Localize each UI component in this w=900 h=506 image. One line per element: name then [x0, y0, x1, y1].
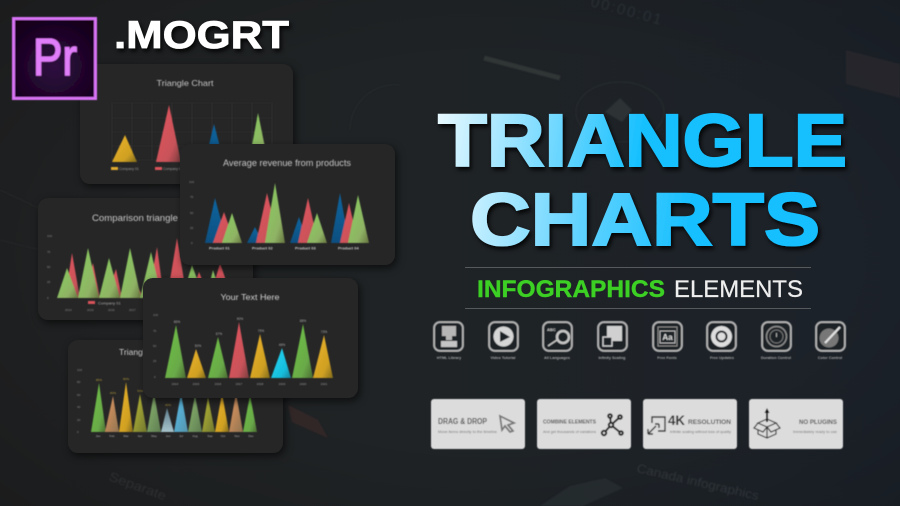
value labels: 70% — [137, 389, 143, 393]
icon: Free Fonts: Aa — [662, 333, 673, 342]
subtitle: INFOGRAPHICS ELEMENTS: ELEMENTS — [674, 276, 803, 303]
triangles: monthly series — [91, 382, 257, 432]
month labels — [96, 434, 254, 438]
triangles: yearly series — [165, 322, 333, 378]
chart card: Comparison triangle chart — [38, 198, 253, 320]
year labels: 2015 — [193, 382, 200, 386]
button: Combine Elements: And get thousands of variations — [543, 430, 596, 434]
year labels: 2020 — [300, 382, 307, 386]
icon: All Languages: ABC — [547, 327, 556, 332]
axis labels: 60 — [77, 393, 81, 397]
value labels: 90% — [237, 317, 243, 321]
icon: Duration Control: Duration Control — [761, 356, 791, 360]
icon: Color Control: Color Control — [818, 356, 842, 360]
button: No Plugins: Immediately ready to use — [793, 430, 837, 434]
chart card: Triangle monthly chart — [68, 340, 283, 453]
card 2 title: Average revenue from products — [223, 158, 352, 168]
year labels: 2019 — [279, 382, 286, 386]
axis labels: 80 — [77, 380, 81, 384]
icon: Infinity Scaling — [598, 322, 627, 360]
subtitle: INFOGRAPHICS ELEMENTS: INFOGRAPHICS — [477, 276, 665, 303]
button: No Plugins — [749, 399, 843, 449]
month labels: May — [151, 434, 157, 438]
value labels: 40% — [165, 403, 171, 407]
title: CHARTS: CHARTS — [470, 178, 820, 261]
icon: Free Fonts — [653, 322, 682, 360]
axis labels: 25 — [153, 359, 157, 363]
product labels: Product 01 — [209, 246, 230, 250]
title: TRIANGLE: TRIANGLE — [438, 99, 847, 182]
card 3 legend and years: 2014 — [65, 308, 72, 312]
icon: Infinity Scaling: Infinity Scaling — [598, 356, 626, 360]
icon: Color Control — [816, 322, 845, 360]
axis labels: 50 — [47, 265, 51, 269]
icon: All Languages: All Languages — [544, 356, 570, 360]
value labels: 48% — [279, 343, 285, 347]
month labels: Oct — [221, 434, 225, 438]
axis labels: 75 — [153, 329, 157, 333]
axis labels: 75 — [47, 250, 51, 254]
button: No Plugins: NO PLUGINS — [799, 419, 837, 426]
icon: Free Updates — [707, 322, 736, 360]
value labels: 75% — [258, 329, 264, 333]
card 4 title: Your Text Here — [220, 292, 280, 302]
axis labels: 0 — [47, 296, 49, 300]
product labels: Product 04 — [338, 246, 359, 250]
icon: All Languages — [543, 322, 572, 360]
month labels: Feb — [109, 434, 115, 438]
product labels: Product 03 — [295, 246, 316, 250]
triangles: product 01 — [205, 198, 242, 243]
month labels: Apr — [138, 434, 142, 438]
card 3 legend and years — [65, 300, 136, 312]
value labels: 86% — [174, 320, 180, 324]
icon: cursor — [500, 416, 514, 432]
button: Drag & Drop: DRAG & DROP — [438, 417, 488, 426]
axis labels: 50 — [190, 211, 194, 215]
value labels — [96, 377, 171, 407]
icon: HTML Library — [434, 322, 463, 360]
icon: Free Fonts: Free Fonts — [657, 356, 677, 360]
icon: Premiere Pro logo — [14, 18, 96, 98]
year labels: 2021 — [321, 382, 328, 386]
card 5 title: Triangle Chart — [119, 347, 173, 357]
card 3 legend and years: 2016 — [108, 308, 115, 312]
chart card: Your Text Here — [143, 278, 358, 398]
faded background motifs: Canada infographics — [635, 461, 760, 503]
value labels — [174, 317, 327, 348]
triangle: red — [156, 105, 181, 162]
axis labels: 0 — [77, 430, 79, 434]
triangle: blue — [205, 124, 224, 162]
value labels: 73% — [321, 330, 327, 334]
month labels: Aug — [192, 434, 198, 438]
year labels: 2016 — [215, 382, 222, 386]
product labels: Product 02 — [252, 246, 273, 250]
heading: .MOGRT: .MOGRT — [114, 14, 289, 57]
icon: Premiere Pro logo: Pr — [33, 29, 77, 87]
subtitle rule bottom — [465, 308, 811, 309]
axis labels: 25 — [47, 280, 51, 284]
icon: HTML Library: HTML Library — [437, 356, 462, 360]
value labels: 50% — [195, 344, 201, 348]
triangles: product 04 — [331, 193, 369, 243]
value labels: 88% — [300, 319, 306, 323]
button: Drag & Drop: Move items directly to the timeline — [438, 430, 497, 434]
axis labels: 75 — [190, 195, 194, 199]
axis labels: 20 — [77, 418, 81, 422]
button: 4K Resolution: 4K — [668, 412, 685, 428]
axis labels: 0 — [154, 375, 156, 379]
year labels: 2014 — [172, 382, 179, 386]
year labels: 2018 — [257, 382, 264, 386]
icon: nodes — [602, 414, 623, 435]
month labels: Jun — [166, 434, 171, 438]
icon: resize — [648, 417, 665, 434]
icon: Duration Control — [761, 322, 791, 360]
card 1 legend: Company 01 — [119, 167, 139, 171]
card 1 title: Triangle Chart — [156, 78, 214, 88]
month labels: Sep — [207, 434, 213, 438]
axis labels: 100 — [153, 313, 158, 317]
icon: Free Updates: Free Updates — [710, 356, 734, 360]
value labels: 90% — [123, 377, 129, 381]
month labels: Mar — [123, 434, 129, 438]
card 1 legend: Company 02 — [163, 167, 183, 171]
button: 4K Resolution: Infinite scaling without loss of quality — [670, 430, 731, 434]
axis labels: 100 — [77, 368, 82, 372]
triangle: yellow — [112, 135, 137, 162]
axis labels: 25 — [190, 226, 194, 230]
year labels — [172, 382, 328, 386]
button: Combine Elements — [537, 399, 631, 449]
product labels — [209, 246, 359, 250]
month labels: Jan — [96, 434, 101, 438]
axis labels — [189, 180, 194, 245]
axis labels: 40 — [77, 405, 81, 409]
button: 4K Resolution — [643, 399, 737, 449]
axis labels: 50 — [153, 344, 157, 348]
axis labels: 100 — [47, 234, 52, 238]
card 3 legend and years: Company 01 — [98, 300, 121, 306]
value labels: 67% — [216, 332, 222, 336]
axis labels — [47, 234, 52, 300]
month labels: Dec — [248, 434, 254, 438]
value labels: 85% — [96, 378, 102, 382]
triangle: green — [249, 113, 268, 162]
axis labels: 0 — [191, 241, 193, 245]
month labels: Jul — [179, 434, 183, 438]
year labels: 2017 — [236, 382, 243, 386]
chart card: Average revenue from products — [180, 144, 395, 265]
faded background motifs: Separate — [107, 469, 168, 503]
icon: Video Tutorial: Video Tutorial — [491, 356, 515, 360]
triangles: product 03 — [290, 198, 327, 243]
chart card: Triangle Chart — [80, 64, 293, 184]
card 3 title: Comparison triangle chart — [92, 213, 203, 223]
subtitle rule top — [465, 267, 811, 268]
card 3 legend and years: 2017 — [129, 308, 136, 312]
icon: Video Tutorial — [489, 322, 518, 360]
subtitle: INFOGRAPHICS ELEMENTS — [477, 276, 803, 303]
button: Drag & Drop — [431, 399, 525, 449]
axis labels — [153, 313, 158, 379]
axis labels: 100 — [189, 180, 194, 184]
card 1 legend — [111, 167, 183, 171]
card 3 legend and years: 2015 — [87, 308, 94, 312]
icon: open box — [754, 419, 780, 438]
month labels: Nov — [234, 434, 240, 438]
triangles: comparison series — [57, 238, 232, 298]
button: Combine Elements: COMBINE ELEMENTS — [543, 420, 596, 426]
axis labels — [77, 368, 82, 434]
icon row — [434, 322, 845, 360]
triangles: product 02 — [247, 183, 285, 243]
feature buttons — [431, 399, 843, 449]
value labels: 60% — [110, 391, 116, 395]
button: 4K Resolution: RESOLUTION — [688, 419, 731, 426]
